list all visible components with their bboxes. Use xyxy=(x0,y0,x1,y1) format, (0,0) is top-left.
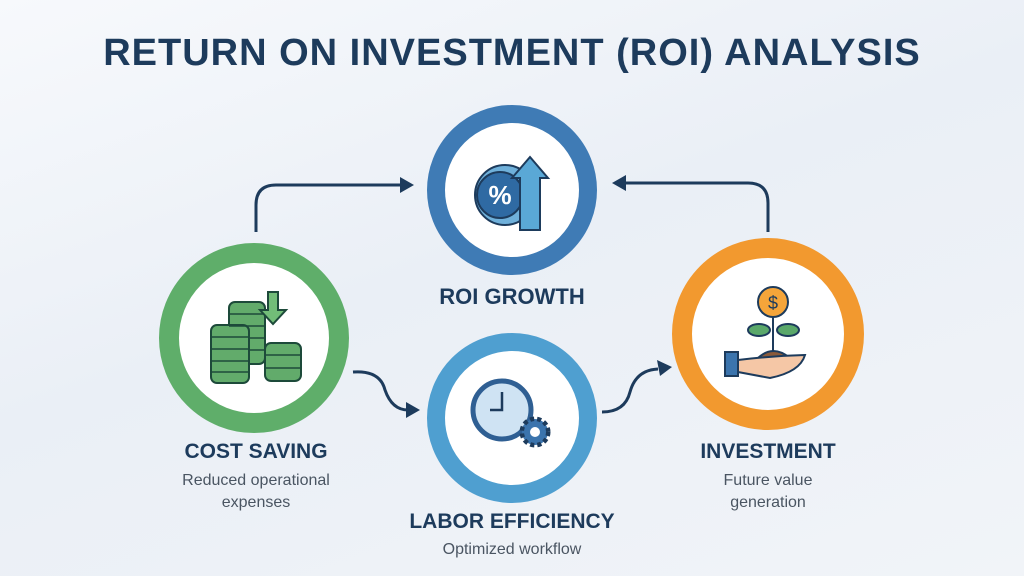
text block: investment: Future value xyxy=(724,472,812,489)
circle: cost saving xyxy=(169,253,339,423)
icon: clock and gear xyxy=(473,381,548,445)
icon: hand with plant: $ xyxy=(768,293,778,313)
text block: labor efficiency xyxy=(409,510,615,558)
icon: percent with arrow xyxy=(475,157,548,230)
arrow: cost saving to ROI xyxy=(256,177,414,232)
arrow: investment to ROI xyxy=(612,175,768,232)
circle: labor efficiency xyxy=(436,342,588,494)
circle: ROI growth xyxy=(436,114,588,266)
icon: coins stack xyxy=(211,292,301,383)
icon: percent with arrow: % xyxy=(488,180,512,210)
text block: cost saving xyxy=(182,440,330,511)
text block: labor efficiency: LABOR EFFICIENCY xyxy=(409,510,615,533)
text block: cost saving: Reduced operational xyxy=(182,472,330,489)
arrow: labor to investment xyxy=(602,360,672,412)
icon: hand with plant xyxy=(725,287,805,378)
text block: investment: INVESTMENT xyxy=(700,440,836,463)
label: ROI growth: ROI GROWTH xyxy=(439,284,585,309)
title: RETURN ON INVESTMENT (ROI) ANALYSIS xyxy=(103,32,921,74)
arrow: cost saving to labor xyxy=(353,372,420,418)
text block: investment xyxy=(700,440,836,511)
text block: investment: generation xyxy=(730,494,806,511)
text block: cost saving: expenses xyxy=(222,494,290,511)
circle: investment xyxy=(682,248,854,420)
text block: cost saving: COST SAVING xyxy=(184,440,328,463)
text block: labor efficiency: Optimized workflow xyxy=(443,541,581,558)
